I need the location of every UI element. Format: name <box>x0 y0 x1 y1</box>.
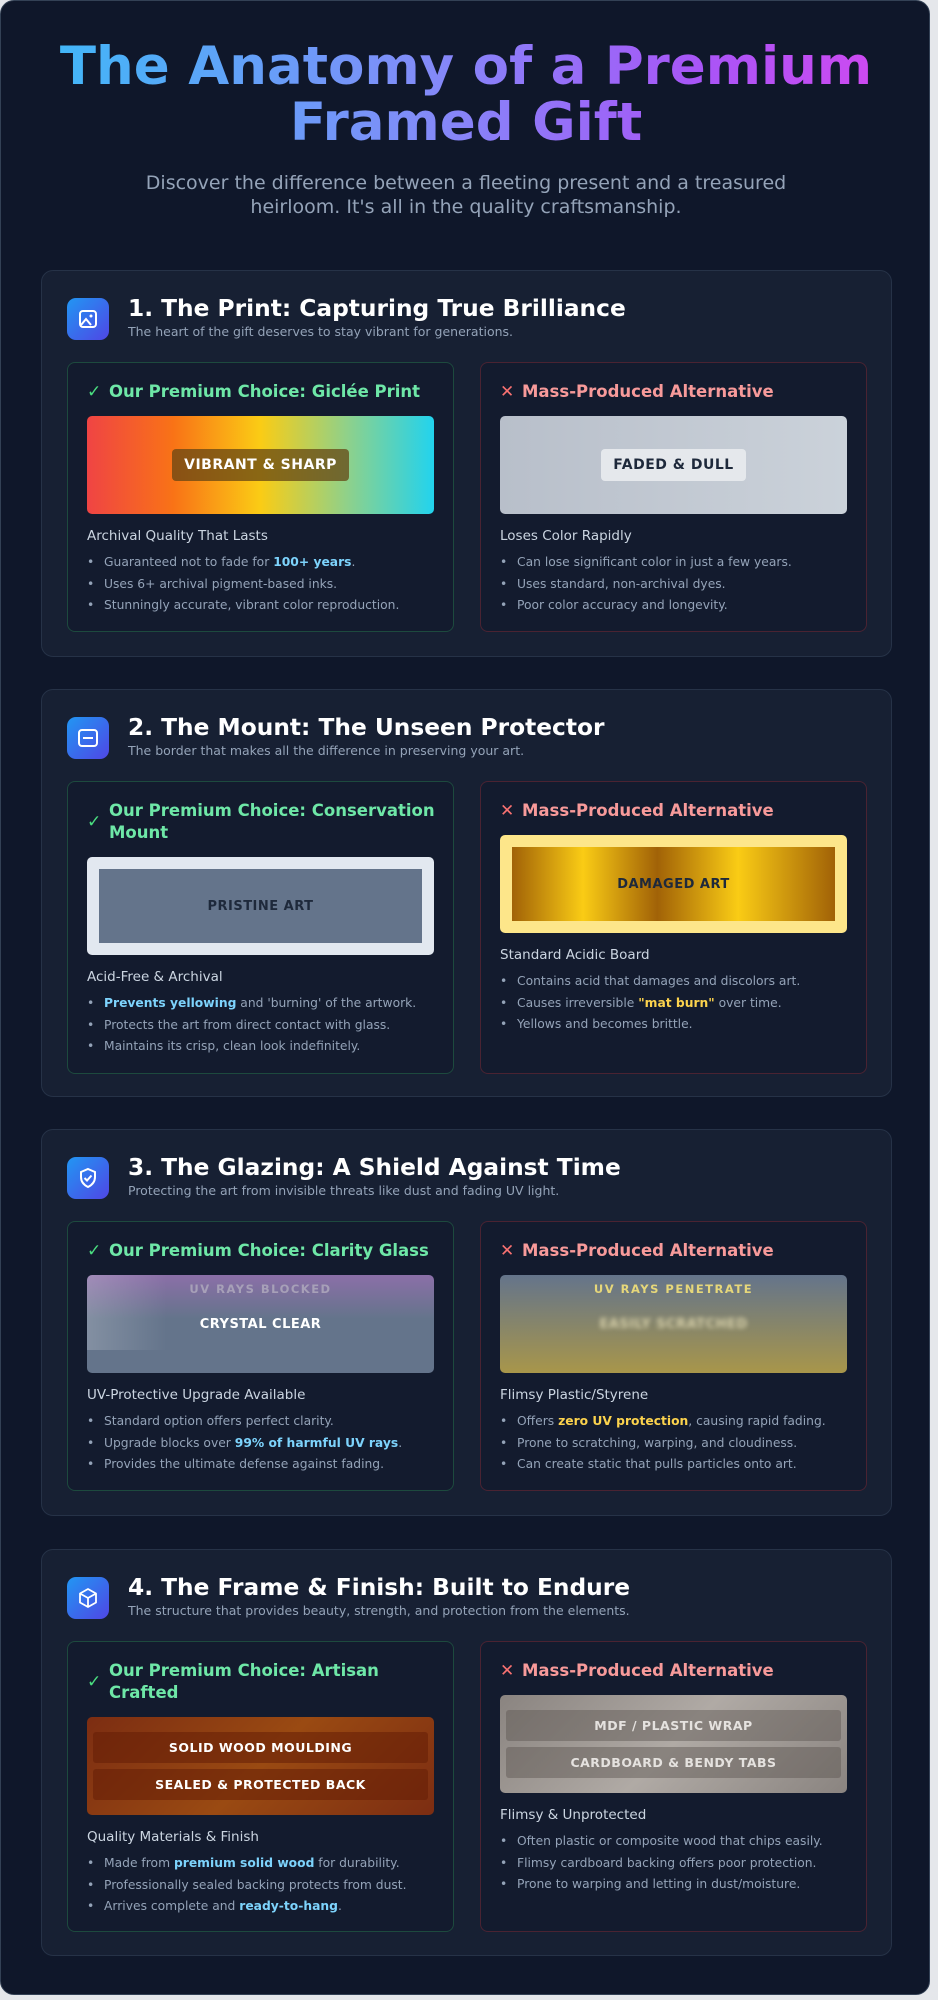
subheading: The border that makes all the difference in preserving your art. <box>128 743 524 758</box>
card: premium print <box>67 362 454 632</box>
subtitle: heirloom. It's all in the quality craftsmanship. <box>250 196 682 218</box>
heading: 1. The Print: Capturing True Brilliance <box>128 295 626 322</box>
visual: vibrant: VIBRANT & SHARP <box>184 457 337 473</box>
visual: wood frame: SEALED & PROTECTED BACK <box>155 1777 366 1792</box>
card: mass produced print: ✕ <box>500 382 514 402</box>
visual: wood frame <box>87 1717 434 1815</box>
visual: mdf frame: CARDBOARD & BENDY TABS <box>570 1755 777 1770</box>
card: artisan crafted: Our Premium Choice: Artisan <box>109 1661 379 1680</box>
card: premium print: Stunningly accurate, vibrant color reproduction. <box>104 598 399 612</box>
card: conservation mount: Maintains its crisp, clean look indefinitely. <box>104 1039 360 1053</box>
card: plastic glazing: ✕ <box>500 1241 514 1261</box>
panel: section 2 mount <box>41 689 892 1097</box>
title <box>1 39 931 151</box>
visual: mdf frame: MDF / PLASTIC WRAP <box>594 1718 753 1733</box>
heading: 4. The Frame & Finish: Built to Endure <box>128 1574 630 1601</box>
card: artisan crafted: Professionally sealed backing protects from dust. <box>104 1878 407 1892</box>
card: acidic board <box>480 781 867 1074</box>
visual: wood frame: SOLID WOOD MOULDING <box>169 1740 352 1755</box>
card: mass produced print: Loses Color Rapidly <box>500 528 632 544</box>
visual: mdf frame <box>500 1695 847 1793</box>
icon: shield <box>67 1157 109 1199</box>
panel: section 4 frame <box>41 1549 892 1956</box>
visual: pristine art: PRISTINE ART <box>207 898 314 914</box>
title: The Anatomy of a Premium <box>60 36 872 97</box>
card: acidic board: Standard Acidic Board <box>500 947 650 963</box>
heading: 2. The Mount: The Unseen Protector <box>128 714 604 741</box>
visual: crystal clear: CRYSTAL CLEAR <box>200 1316 321 1332</box>
card: mass produced print <box>480 362 867 632</box>
card: artisan crafted <box>67 1641 454 1932</box>
card: clarity glass: ✓ <box>87 1241 101 1261</box>
card: premium print: Our Premium Choice: Giclée Print <box>109 382 420 401</box>
card: mdf: ✕ <box>500 1661 514 1681</box>
visual: crystal clear <box>87 1275 434 1373</box>
subtitle: Discover the difference between a fleeting present and a treasured <box>146 172 786 194</box>
card: artisan crafted: ✓ <box>87 1672 101 1692</box>
visual: faded <box>500 416 847 514</box>
visual: faded: FADED & DULL <box>613 457 734 473</box>
panel: section 3 glazing <box>41 1129 892 1516</box>
card: mdf: Flimsy cardboard backing offers poor protection. <box>517 1856 816 1870</box>
card: conservation mount <box>67 781 454 1074</box>
card: clarity glass <box>67 1221 454 1491</box>
card: artisan crafted: Arrives complete and ready-to-hang. <box>104 1899 342 1913</box>
card: plastic glazing <box>480 1221 867 1491</box>
visual: uv penetrate: EASILY SCRATCHED <box>599 1316 748 1332</box>
card: clarity glass: Our Premium Choice: Clarity Glass <box>109 1241 429 1260</box>
card: premium print: ✓ <box>87 382 101 402</box>
heading: 3. The Glazing: A Shield Against Time <box>128 1154 621 1181</box>
card: mass produced print: Can lose significant color in just a few years. <box>517 555 792 569</box>
icon: mount <box>67 717 109 759</box>
card: clarity glass: Standard option offers perfect clarity. <box>104 1414 334 1428</box>
card: conservation mount: Mount <box>109 823 168 842</box>
card: mass produced print: Poor color accuracy and longevity. <box>517 598 728 612</box>
card: clarity glass: Provides the ultimate defense against fading. <box>104 1457 384 1471</box>
card: mdf: Mass-Produced Alternative <box>522 1661 774 1680</box>
visual: damaged art: DAMAGED ART <box>617 876 730 892</box>
card: plastic glazing: Prone to scratching, warping, and cloudiness. <box>517 1436 797 1450</box>
card: mass produced print: Mass-Produced Alternative <box>522 382 774 401</box>
visual: pristine art <box>87 857 434 955</box>
icon: cube <box>67 1577 109 1619</box>
visual: damaged art <box>500 835 847 933</box>
subheading: Protecting the art from invisible threats like dust and fading UV light. <box>128 1183 559 1198</box>
icon: image <box>67 298 109 340</box>
card: acidic board: Contains acid that damages and discolors art. <box>517 974 800 988</box>
card: plastic glazing: Flimsy Plastic/Styrene <box>500 1387 648 1403</box>
card: plastic glazing: Can create static that pulls particles onto art. <box>517 1457 797 1471</box>
card: acidic board: ✕ <box>500 801 514 821</box>
card: premium print: Archival Quality That Lasts <box>87 528 268 544</box>
card: premium print: Guaranteed not to fade for 100+ years. <box>104 555 355 569</box>
card: mdf: Flimsy & Unprotected <box>500 1807 646 1823</box>
card: premium print: Uses 6+ archival pigment-based inks. <box>104 576 337 590</box>
card: mass produced print: Uses standard, non-archival dyes. <box>517 576 726 590</box>
card: plastic glazing: Mass-Produced Alternative <box>522 1241 774 1260</box>
visual: uv penetrate <box>500 1275 847 1373</box>
card: artisan crafted: Crafted <box>109 1683 178 1702</box>
card: artisan crafted: Quality Materials & Finish <box>87 1829 259 1845</box>
card: acidic board: Yellows and becomes brittle. <box>517 1017 693 1031</box>
visual: uv penetrate: UV RAYS PENETRATE <box>594 1282 753 1296</box>
card: clarity glass: UV-Protective Upgrade Available <box>87 1387 305 1403</box>
card: acidic board: Mass-Produced Alternative <box>522 801 774 820</box>
card: conservation mount: ✓ <box>87 812 101 832</box>
subheading: The heart of the gift deserves to stay vibrant for generations. <box>128 324 513 339</box>
card: conservation mount: Acid-Free & Archival <box>87 969 223 985</box>
card: artisan crafted: Made from premium solid wood for durability. <box>104 1856 400 1870</box>
card: conservation mount: Prevents yellowing and 'burning' of the artwork. <box>104 996 416 1010</box>
title: Framed Gift <box>290 92 642 153</box>
card: conservation mount: Our Premium Choice: Conservation <box>109 801 435 820</box>
card: mdf: Often plastic or composite wood that chips easily. <box>517 1834 823 1848</box>
visual: crystal clear: UV RAYS BLOCKED <box>189 1282 332 1296</box>
subheading: The structure that provides beauty, strength, and protection from the elements. <box>128 1603 630 1618</box>
panel: section 1 print <box>41 270 892 657</box>
card: conservation mount: Protects the art from direct contact with glass. <box>104 1018 390 1032</box>
card: acidic board: Causes irreversible "mat burn" over time. <box>517 996 782 1010</box>
card: mdf <box>480 1641 867 1932</box>
card: plastic glazing: Offers zero UV protection, causing rapid fading. <box>517 1414 826 1428</box>
card: mdf: Prone to warping and letting in dust/moisture. <box>517 1877 800 1891</box>
visual: vibrant <box>87 416 434 514</box>
card: clarity glass: Upgrade blocks over 99% of harmful UV rays. <box>104 1436 402 1450</box>
subtitle <box>146 172 786 218</box>
